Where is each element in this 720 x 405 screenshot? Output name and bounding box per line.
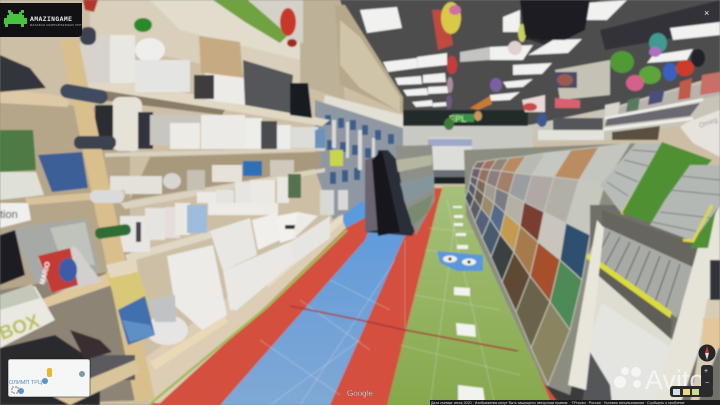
third row game cases — [470, 176, 590, 280]
white sign: tion — [0, 209, 18, 221]
dark floor base under cabinet — [545, 368, 594, 405]
bottom left dark console area — [0, 330, 140, 405]
white floor markers — [453, 206, 485, 402]
lower left shelf — [110, 152, 325, 215]
close icon: × — [704, 8, 709, 18]
left cabinet post — [568, 220, 604, 390]
large white boxes — [210, 212, 330, 310]
white poster box — [680, 97, 720, 157]
back sign letters: EPL — [449, 114, 467, 124]
fifth row game cases — [465, 190, 570, 385]
floor — [150, 186, 594, 405]
game spines shelf — [588, 226, 695, 318]
air purifier — [167, 245, 227, 330]
upper shelf transparent boxes — [80, 35, 135, 83]
blue stripe — [220, 188, 432, 405]
Avito watermark — [614, 365, 705, 395]
floor red line — [290, 306, 518, 351]
floor ghost mascot — [437, 251, 483, 271]
attribution bar — [430, 400, 720, 405]
upper shelf white boxes — [135, 60, 190, 92]
minimap — [8, 359, 90, 397]
fourth row game cases — [468, 182, 582, 330]
red stripe right — [330, 188, 438, 405]
dark monitor panel — [243, 60, 293, 113]
green overhang — [213, 0, 288, 43]
white plush — [135, 38, 165, 62]
logo — [0, 3, 82, 37]
top right shelves with figures — [532, 60, 720, 142]
wood cabinet base — [145, 214, 347, 404]
second row game cases — [471, 168, 605, 235]
right cabinet post — [655, 205, 720, 405]
humidifier — [146, 315, 188, 345]
layer switcher — [670, 386, 713, 397]
mario figure package — [38, 246, 102, 293]
top row game cases — [473, 143, 630, 183]
mario figure package: MARIO — [39, 261, 52, 286]
compass and zoom controls: − — [705, 380, 709, 387]
red stripe left — [163, 226, 368, 405]
Google mark: Google — [347, 389, 373, 398]
green and gray game stacks — [600, 142, 720, 248]
gamepads — [59, 27, 132, 239]
ceiling — [340, 0, 720, 125]
hanging plush toys — [432, 0, 705, 130]
minimap label: ОЛИМП ТРЦ — [9, 380, 42, 386]
compass and zoom controls — [698, 344, 716, 389]
hanging product blisters — [106, 258, 155, 345]
left items — [0, 55, 88, 200]
back wall and sign band — [403, 110, 533, 184]
pegboard wall — [315, 5, 403, 225]
right game shelves — [464, 143, 640, 395]
white poster box: Omeg — [698, 117, 719, 130]
attribution bar: Дата съемки: июнь 2020 · Изображения могут быть защищены авторским правом. · ©Роскво · Россия · Условия использования · Сообщить о проблеме — [431, 401, 685, 405]
bottom left shelf with boxes — [0, 88, 278, 308]
middle left shelf — [95, 97, 325, 157]
pegman icon — [47, 368, 52, 377]
compass and zoom controls: + — [704, 368, 708, 375]
green aisle — [387, 186, 552, 405]
logo invader icon — [4, 10, 27, 27]
central black rack with games — [365, 145, 435, 236]
cardboard box — [199, 36, 243, 78]
red figure — [280, 8, 296, 36]
console box xbox — [0, 218, 100, 348]
Avito watermark: Avito — [645, 365, 705, 395]
wooden vertical post — [60, 38, 155, 402]
upper left shelf — [80, 0, 330, 126]
white display cabinet — [568, 97, 720, 405]
logo name: AMAZINGAME — [30, 16, 72, 23]
white console box — [590, 303, 675, 400]
logo tagline: МАГАЗИН КОМПЬЮТЕРНЫХ ИГР — [30, 23, 82, 27]
white sign — [0, 203, 31, 228]
